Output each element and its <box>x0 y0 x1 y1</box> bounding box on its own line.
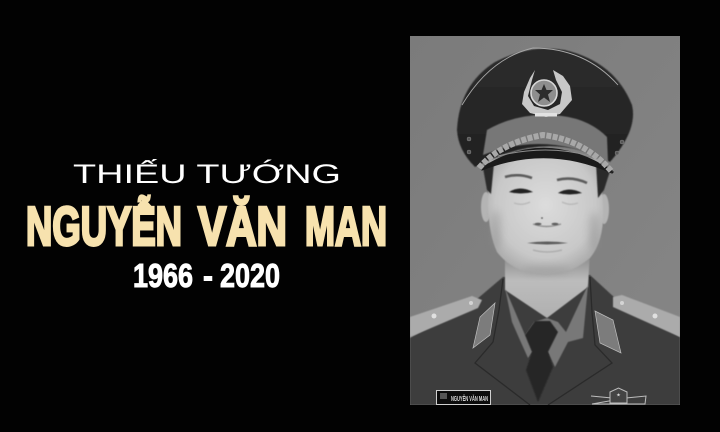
text: life years: 1966 <box>133 257 193 294</box>
cap visor <box>482 149 612 172</box>
text: life years: - <box>203 257 213 294</box>
face <box>488 154 603 275</box>
shirt collar <box>505 285 588 367</box>
nose <box>533 217 561 226</box>
cap crown <box>457 48 633 167</box>
eyes <box>509 188 582 204</box>
infographic canvas <box>27 36 680 405</box>
mouth <box>527 242 568 252</box>
text: life years: 2020 <box>220 257 280 294</box>
face shading <box>491 210 599 274</box>
left collar tab <box>473 303 495 348</box>
hair <box>483 163 611 198</box>
right shoulder board <box>613 295 680 337</box>
photo backdrop <box>410 36 680 405</box>
parachute wings badge <box>591 388 646 404</box>
heading: name <box>26 195 387 257</box>
left shoulder board <box>410 296 482 337</box>
cap top rim highlight <box>462 48 618 105</box>
text: life years <box>133 257 280 294</box>
cap badge <box>522 70 572 117</box>
cap side vents <box>467 137 624 155</box>
cap band <box>483 115 608 162</box>
heading: name: VĂN <box>198 195 287 257</box>
visor trim <box>498 150 590 156</box>
heading: name: NGUYỄN <box>26 195 182 257</box>
right collar tab <box>595 311 621 353</box>
neck <box>504 259 590 318</box>
necktie <box>525 321 558 402</box>
uniform jacket <box>410 275 680 405</box>
heading: name: MAN <box>305 195 387 257</box>
name tag <box>436 390 490 404</box>
heading: rank: THIẾU TƯỚNG <box>73 158 341 189</box>
cap braid <box>479 135 612 172</box>
eyebrows <box>505 175 587 183</box>
ears <box>481 192 609 224</box>
jacket lapels <box>475 277 612 405</box>
portrait photo <box>410 36 680 405</box>
name tag: NGUYỄN VĂN MAN <box>451 394 488 403</box>
